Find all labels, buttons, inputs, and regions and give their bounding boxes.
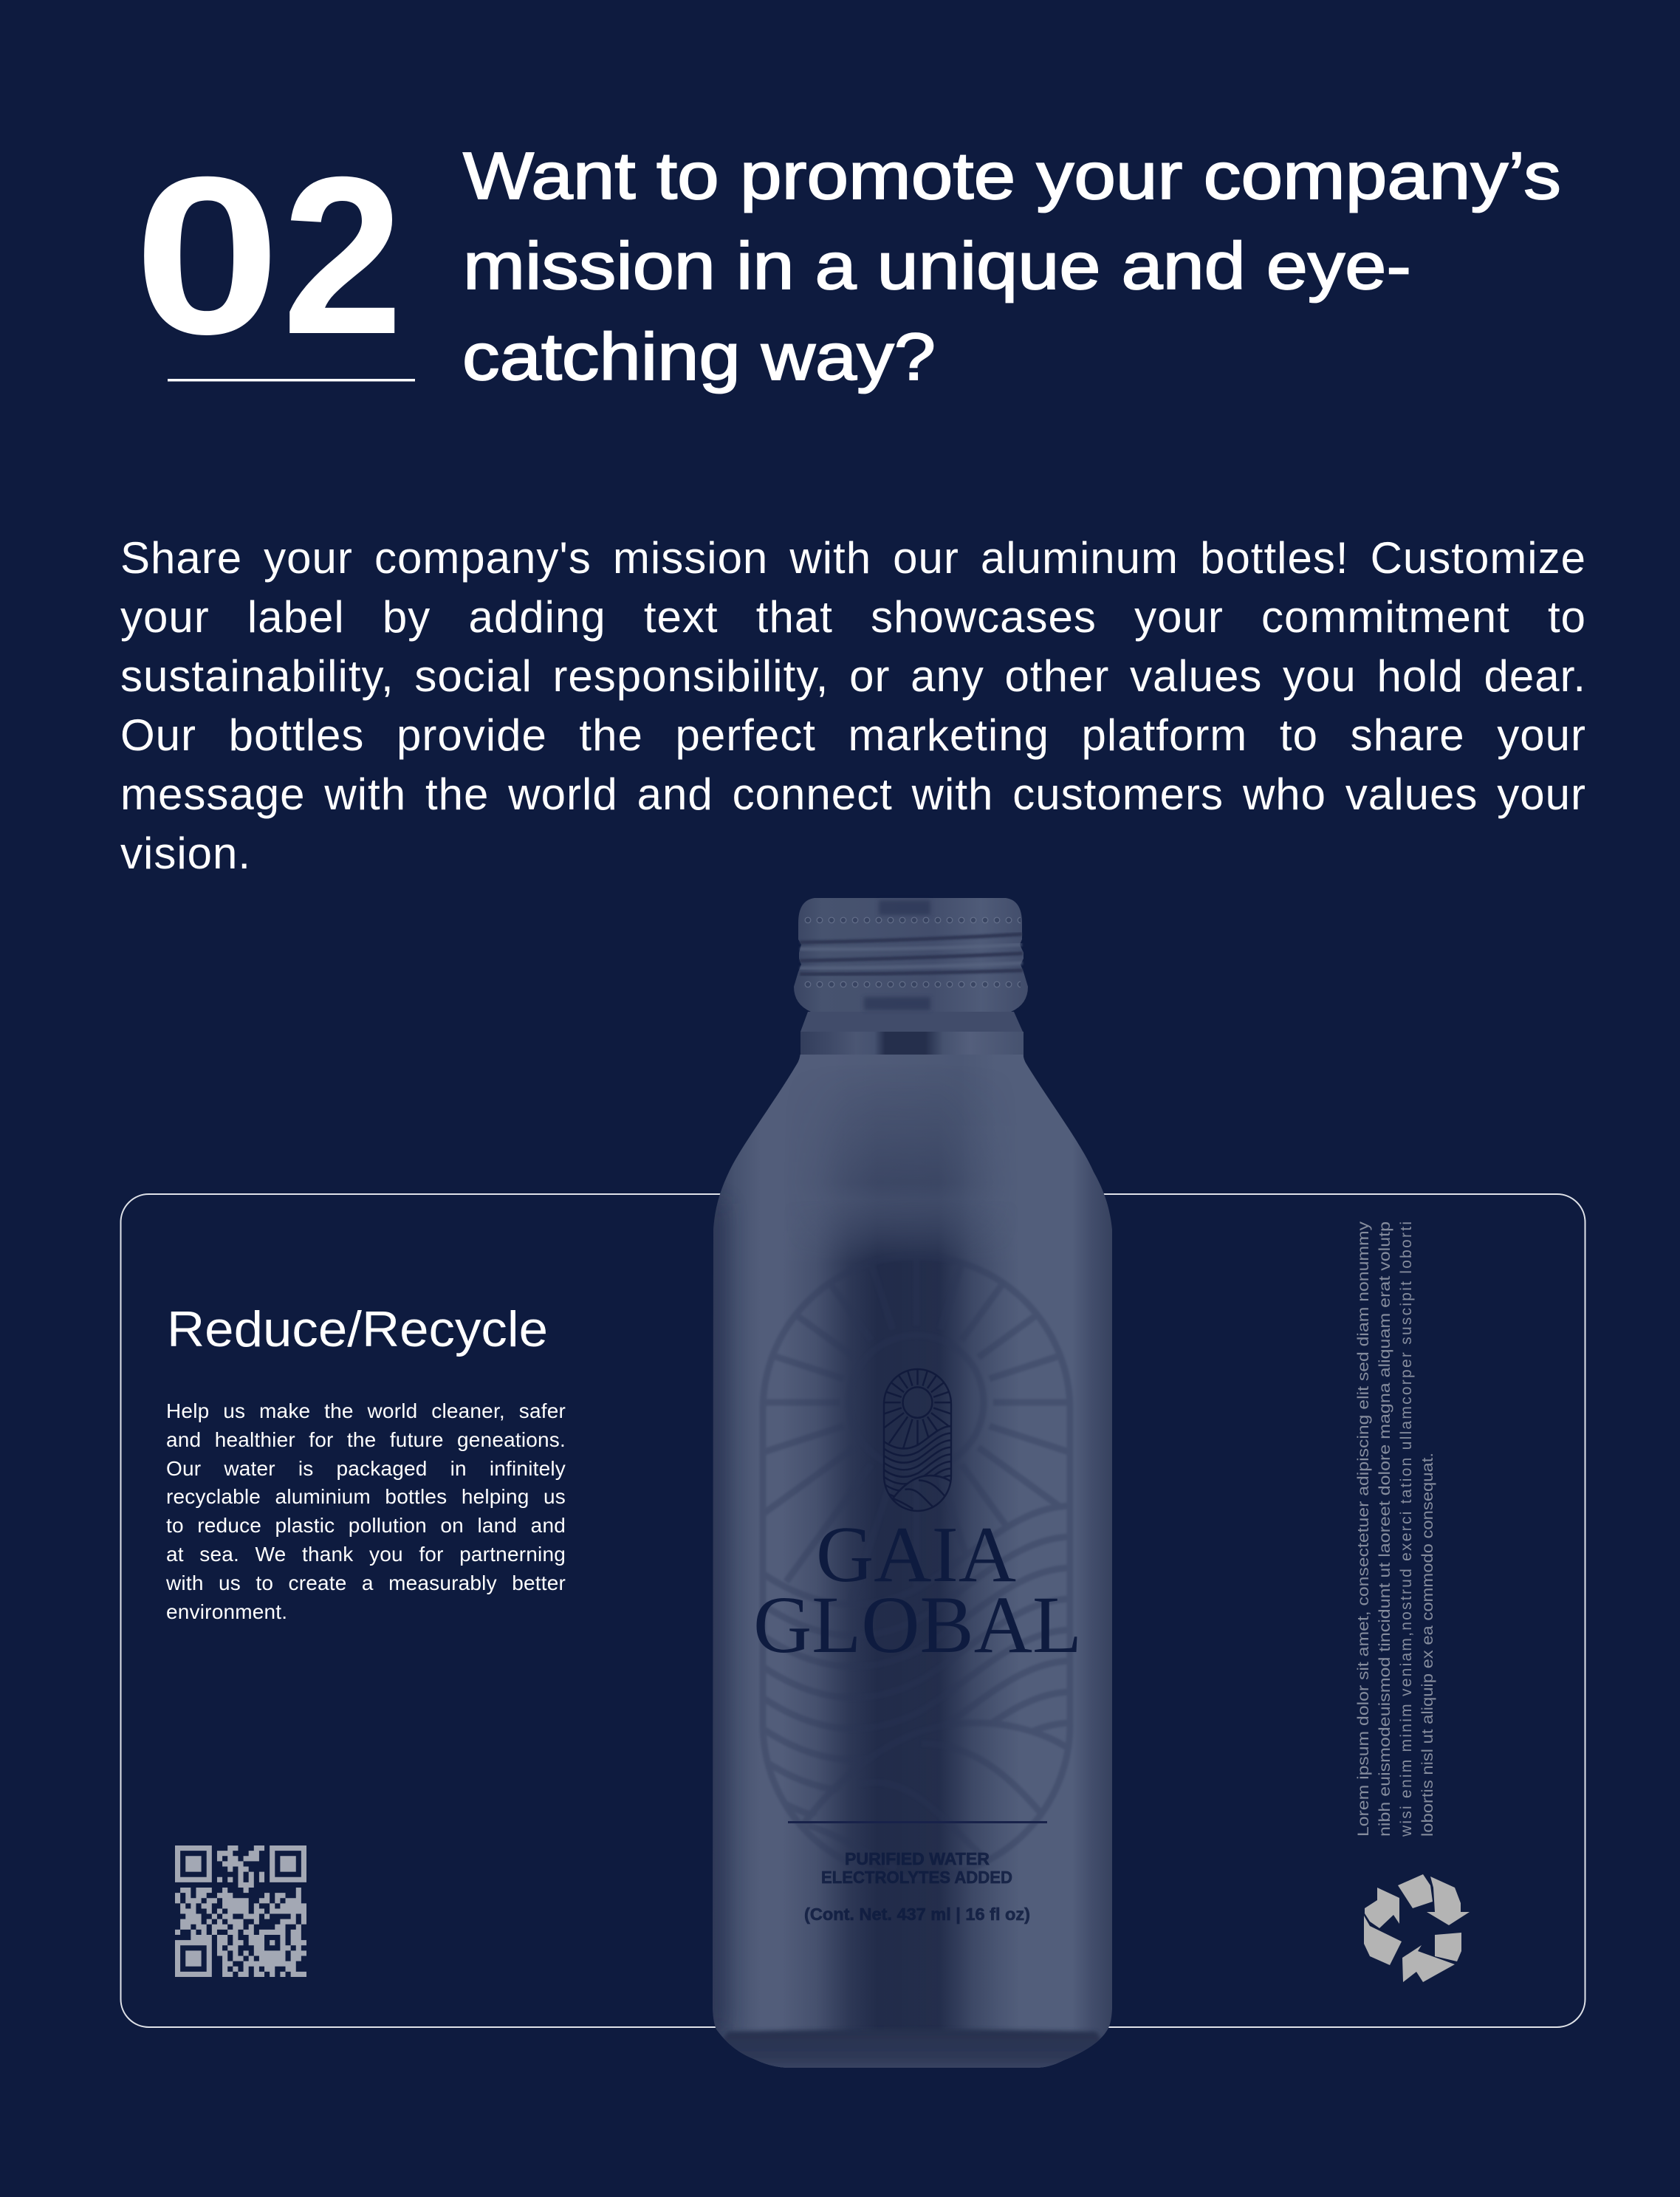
bottle label: GAIA GLOBAL wordmark: GAIA	[816, 1511, 1016, 1599]
title: question headline: Want to promote your company’s	[463, 140, 1561, 213]
bottle label: large background emblem	[695, 1181, 1138, 1878]
text block: mission paragraph	[120, 533, 1586, 878]
text block: vertical lorem ipsum: lobortis nisl ut aliquip ex ea commodo consequat.	[1419, 1453, 1436, 1837]
text block: recycling message: Our water is packaged in infinitely	[166, 1457, 566, 1480]
text block: mission paragraph: message with the world and connect with customers who values your	[120, 770, 1586, 819]
text block: vertical lorem ipsum: Lorem ipsum dolor sit amet, consectetuer adipiscing elit sed diam nonummy	[1355, 1221, 1372, 1837]
text block: mission paragraph: Our bottles provide the perfect marketing platform to share your	[120, 710, 1586, 760]
text block: recycling message: Help us make the world cleaner, safer	[166, 1399, 566, 1422]
text block: mission paragraph: Share your company's mission with our aluminum bottles! Customize	[120, 533, 1586, 583]
text block: mission paragraph: vision.	[120, 829, 251, 878]
bottle body	[702, 1055, 1122, 2075]
text block: recycling message: recyclable aluminium bottles helping us	[166, 1485, 566, 1508]
bottle cap	[794, 898, 1028, 1012]
text block: vertical lorem ipsum: wisi enim minim veniam,nostrud exerci tation ullamcorper suscipit loborti	[1398, 1221, 1415, 1837]
title: question headline: mission in a unique and eye-	[463, 230, 1411, 304]
text block: recycling message: to reduce plastic pollution on land and	[166, 1514, 566, 1537]
title: question headline: catching way?	[462, 321, 936, 394]
bottle label: small sun and wave logo	[869, 1352, 966, 1511]
bottle label: product details	[804, 1849, 1030, 1924]
number heading: 02: 0	[134, 130, 281, 381]
bottle label: rule	[788, 1821, 1047, 1823]
text block: vertical lorem ipsum: nibh euismodeuismod tincidunt ut laoreet dolore magna aliquam erat volutp	[1376, 1221, 1393, 1837]
text block: mission paragraph: sustainability, social responsibility, or any other values you hold dear.	[120, 651, 1586, 701]
text block: recycling message: with us to create a measurably better	[166, 1572, 566, 1594]
bottle label: product details: ELECTROLYTES ADDED	[821, 1868, 1012, 1887]
number heading: 02: 2	[282, 131, 403, 381]
bottle: aluminium bottle with Gaia Global label	[713, 898, 1112, 2068]
text block: recycling message	[166, 1399, 566, 1623]
text block: mission paragraph: your label by adding text that showcases your commitment to	[120, 592, 1586, 642]
bottle label: GAIA GLOBAL wordmark: GLOBAL	[753, 1580, 1082, 1670]
bottle label: GAIA GLOBAL wordmark	[753, 1511, 1082, 1670]
bottle label: product details: PURIFIED WATER	[845, 1849, 990, 1868]
bottle neck	[800, 1012, 1024, 1057]
bottle label: product details: (Cont. Net. 437 ml | 16 fl oz)	[804, 1905, 1030, 1924]
text block: recycling message: and healthier for the future geneations.	[166, 1428, 566, 1451]
heading: Reduce/Recycle: Reduce/Recycle	[167, 1301, 548, 1357]
text block: recycling message: environment.	[166, 1600, 287, 1623]
text block: recycling message: at sea. We thank you for partnerning	[166, 1543, 566, 1566]
